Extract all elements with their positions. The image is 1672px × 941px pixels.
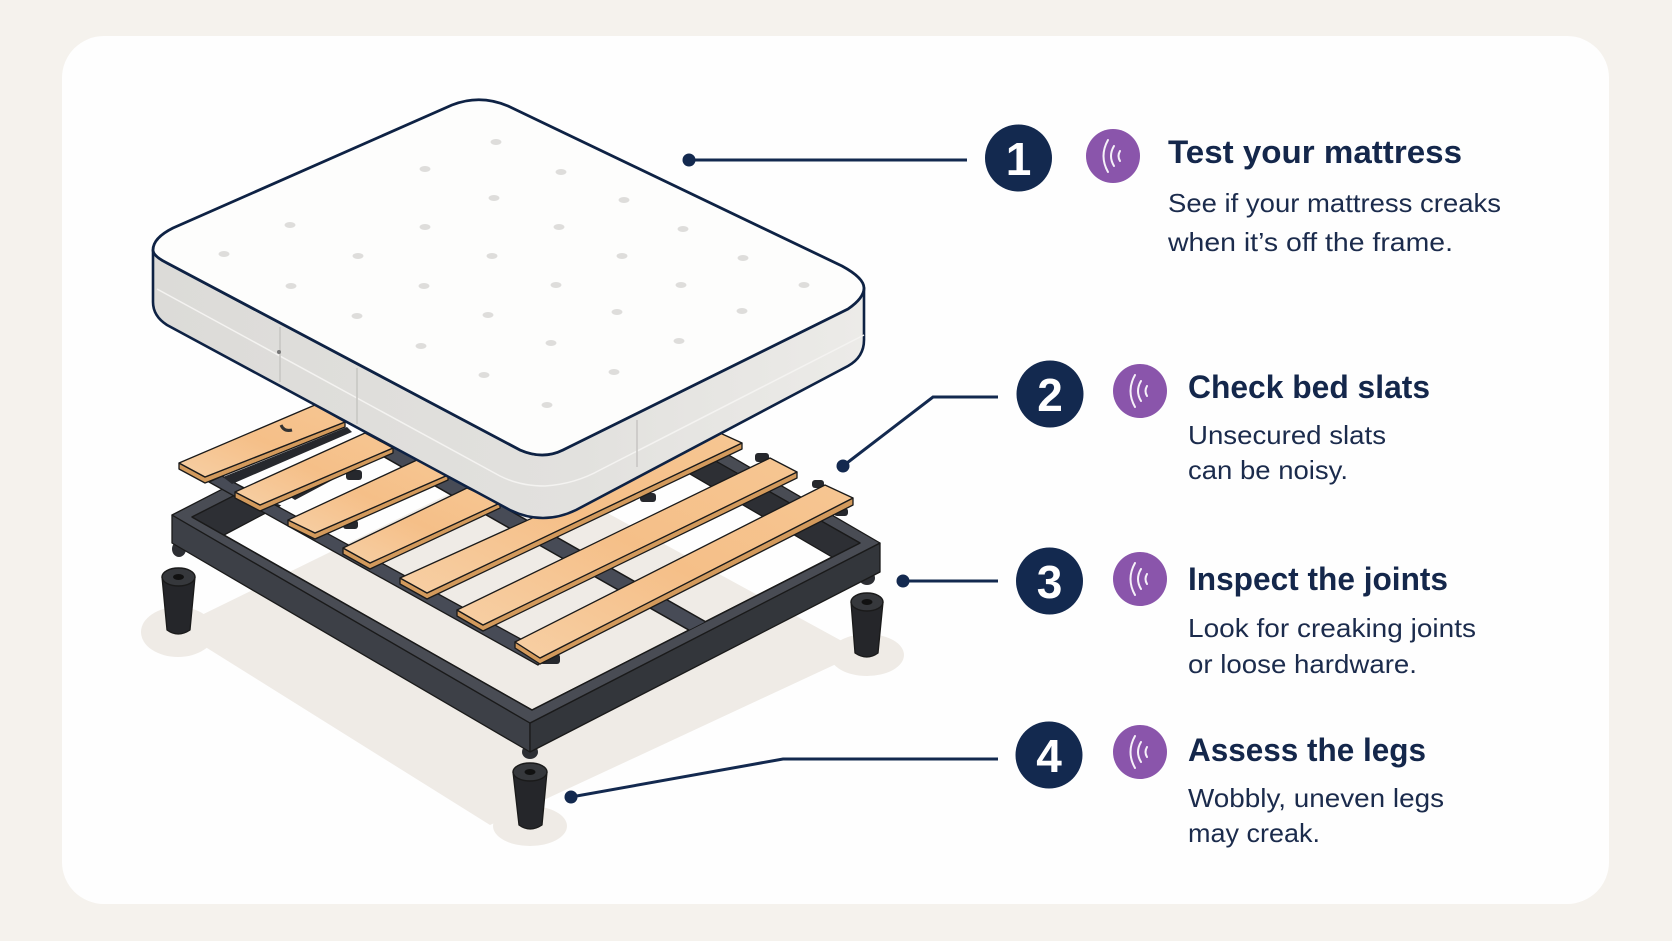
- callout line 3: [896, 574, 998, 588]
- callout line 1: [682, 154, 967, 166]
- number badge 1: 1: [1006, 133, 1031, 185]
- description 1: when it’s off the frame.: [1167, 227, 1453, 257]
- icon: sound waves 2: [1113, 364, 1167, 418]
- number badge 2: [1016, 360, 1084, 428]
- description 4: Wobbly, uneven legs: [1188, 783, 1444, 813]
- step 4: Assess the legs: [564, 722, 1444, 848]
- heading 1: Test your mattress: [1168, 134, 1462, 170]
- number badge 4: 4: [1036, 730, 1062, 782]
- icon: sound waves 3: [1113, 552, 1167, 606]
- heading 2: Check bed slats: [1188, 369, 1430, 405]
- callout line 4: [564, 759, 998, 804]
- left leg: [162, 568, 195, 634]
- open space behind the slat rail: [222, 335, 530, 515]
- callout line 2: [836, 397, 998, 472]
- description 4: may creak.: [1188, 818, 1320, 848]
- icon: sound waves 1: [1086, 129, 1140, 183]
- center support rail: [384, 448, 706, 630]
- mattress top: [153, 100, 864, 455]
- number badge 4: [1016, 722, 1082, 788]
- step 3: Inspect the joints: [896, 548, 1476, 679]
- description 1: See if your mattress creaks: [1168, 188, 1501, 218]
- heading 4: Assess the legs: [1188, 732, 1426, 768]
- step 1: Test your mattress: [682, 124, 1501, 257]
- step 2: Check bed slats: [836, 360, 1430, 485]
- bed frame: [172, 335, 880, 759]
- number badge 1: [985, 124, 1052, 192]
- right leg: [851, 593, 883, 657]
- description 3: or loose hardware.: [1188, 649, 1417, 679]
- number badge 3: 3: [1037, 556, 1062, 608]
- floor shadow: [141, 462, 904, 846]
- description 2: can be noisy.: [1188, 455, 1348, 485]
- near slat rail: [209, 476, 550, 665]
- description 3: Look for creaking joints: [1188, 613, 1476, 643]
- hardware under slats: [223, 427, 848, 664]
- number badge 3: [1016, 548, 1083, 614]
- number badge 2: 2: [1037, 369, 1063, 421]
- illustration: exploded bed: [141, 100, 904, 846]
- mattress tufting: [218, 139, 810, 408]
- heading 3: Inspect the joints: [1188, 561, 1448, 597]
- wooden slats: [179, 405, 853, 664]
- mattress: [153, 100, 864, 518]
- mattress side: [153, 250, 864, 518]
- icon: sound waves 4: [1113, 725, 1167, 779]
- front leg: [513, 763, 547, 829]
- description 2: Unsecured slats: [1188, 420, 1386, 450]
